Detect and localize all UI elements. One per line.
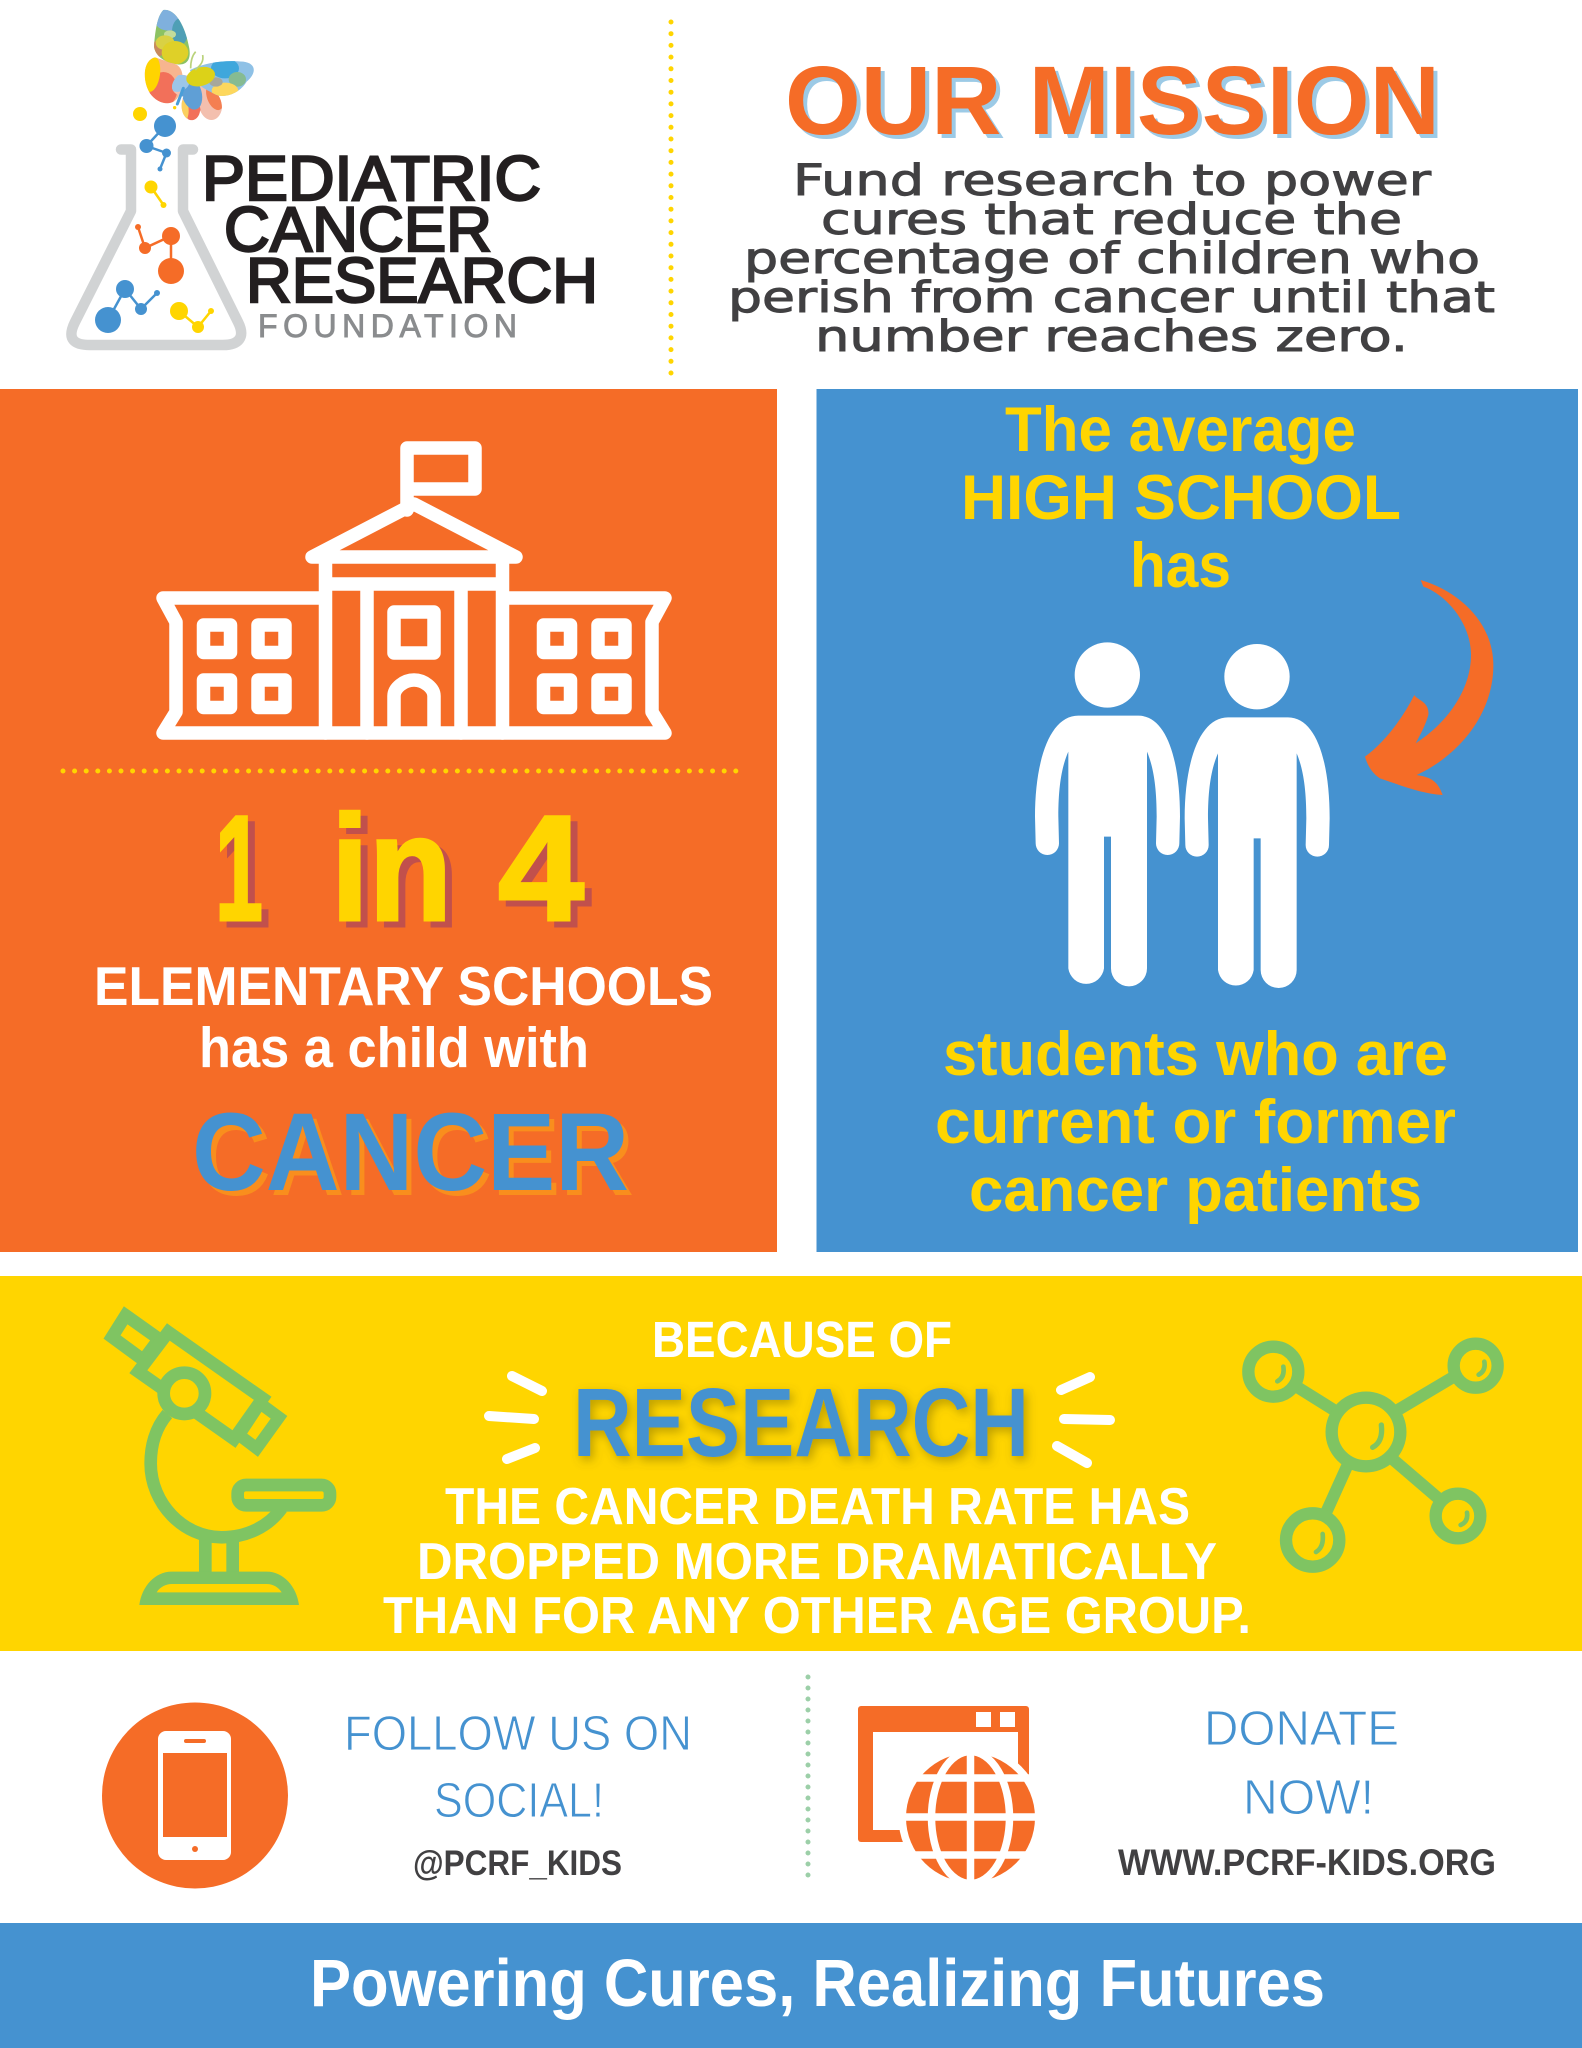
text: follow us on social: FOLLOW US ON (344, 1707, 692, 1761)
text: follow us on social (344, 1707, 692, 1883)
text: tagline: Powering Cures, Realizing Futures (310, 1946, 1325, 2021)
text: students who are current or former cancer patients: current or former (935, 1088, 1456, 1157)
stat: 1 in 4: 4 (498, 784, 584, 952)
stat: 1 in 4 (215, 784, 591, 958)
icon: flask (71, 150, 241, 345)
icon: molecules rising from flask (95, 107, 214, 333)
text: cancer: CANCER (197, 1096, 634, 1219)
stat: 1 in 4: 4 (505, 790, 591, 958)
heading: our mission: OUR MISSION (785, 46, 1440, 155)
text: students who are current or former cancer patients: students who are (943, 1020, 1448, 1089)
text: death rate statement: DROPPED MORE DRAMATICALLY (417, 1533, 1217, 1591)
stat: 1 in 4: in (338, 790, 459, 958)
stat: 1 in 4: in (331, 784, 452, 952)
text: mission statement: perish from cancer until that (728, 273, 1495, 323)
text: the average high school has: The average (1005, 395, 1356, 465)
text: elementary schools has a child with: ELEMENTARY SCHOOLS (94, 955, 713, 1017)
text: follow us on social: SOCIAL! (434, 1774, 604, 1828)
text: students who are current or former cancer patients: cancer patients (969, 1156, 1422, 1225)
text: death rate statement (383, 1478, 1251, 1645)
panel: yellow research band (0, 1276, 1582, 1651)
icon: phone in orange circle (102, 1702, 288, 1888)
text: research: RESEARCH (573, 1368, 1029, 1477)
text: cancer: CANCER (192, 1091, 629, 1214)
logo wordmark: CANCER (224, 195, 492, 265)
logo wordmark: RESEARCH (246, 246, 598, 316)
icon: browser window with globe (858, 1706, 1042, 1890)
text: donate now: NOW! (1243, 1771, 1374, 1825)
text: death rate statement: THE CANCER DEATH RATE HAS (445, 1478, 1190, 1536)
text: death rate statement: THAN FOR ANY OTHER AGE GROUP. (383, 1587, 1251, 1645)
text: the average high school has: has (1130, 531, 1231, 601)
icon: school building (163, 448, 665, 733)
stat: 1 in 4: 1 (222, 790, 270, 958)
text: elementary schools has a child with: has a child with (199, 1016, 589, 1080)
logo wordmark: FOUNDATION (258, 308, 517, 344)
text: donate now: WWW.PCRF-KIDS.ORG (1118, 1842, 1496, 1883)
text: donate now (1118, 1702, 1496, 1883)
text: the average high school has: HIGH SCHOOL (961, 463, 1401, 533)
panel: blue high school (816, 389, 1578, 1252)
arrow: curved orange arrow (1365, 580, 1493, 795)
text: mission statement: number reaches zero. (815, 312, 1408, 362)
text: mission statement (728, 156, 1495, 362)
logo wordmark: PEDIATRIC (202, 144, 541, 214)
icon: two students (1035, 642, 1330, 988)
text: students who are current or former cancer patients (935, 1020, 1456, 1225)
text: mission statement: Fund research to power (793, 156, 1431, 206)
icon: butterfly (144, 10, 254, 120)
icon: molecule (1248, 1344, 1498, 1567)
heading: our mission: OUR MISSION (789, 50, 1444, 159)
text: because of: BECAUSE OF (652, 1311, 952, 1368)
text: the average high school has (961, 395, 1401, 601)
panel: orange elementary schools (0, 389, 777, 1252)
text: mission statement: percentage of children who (744, 234, 1480, 284)
text: elementary schools has a child with (94, 955, 713, 1080)
decoration: emphasis rays (489, 1376, 1110, 1463)
stat: 1 in 4: 1 (215, 784, 263, 952)
footer band (0, 1923, 1582, 2048)
icon: microscope (112, 1315, 330, 1605)
logo: Pediatric Cancer Research Foundation (71, 7, 598, 345)
text: follow us on social: @PCRF_KIDS (413, 1844, 622, 1883)
text: donate now: DONATE (1204, 1702, 1399, 1756)
logo wordmark (202, 144, 598, 344)
text: mission statement: cures that reduce the (821, 195, 1402, 245)
